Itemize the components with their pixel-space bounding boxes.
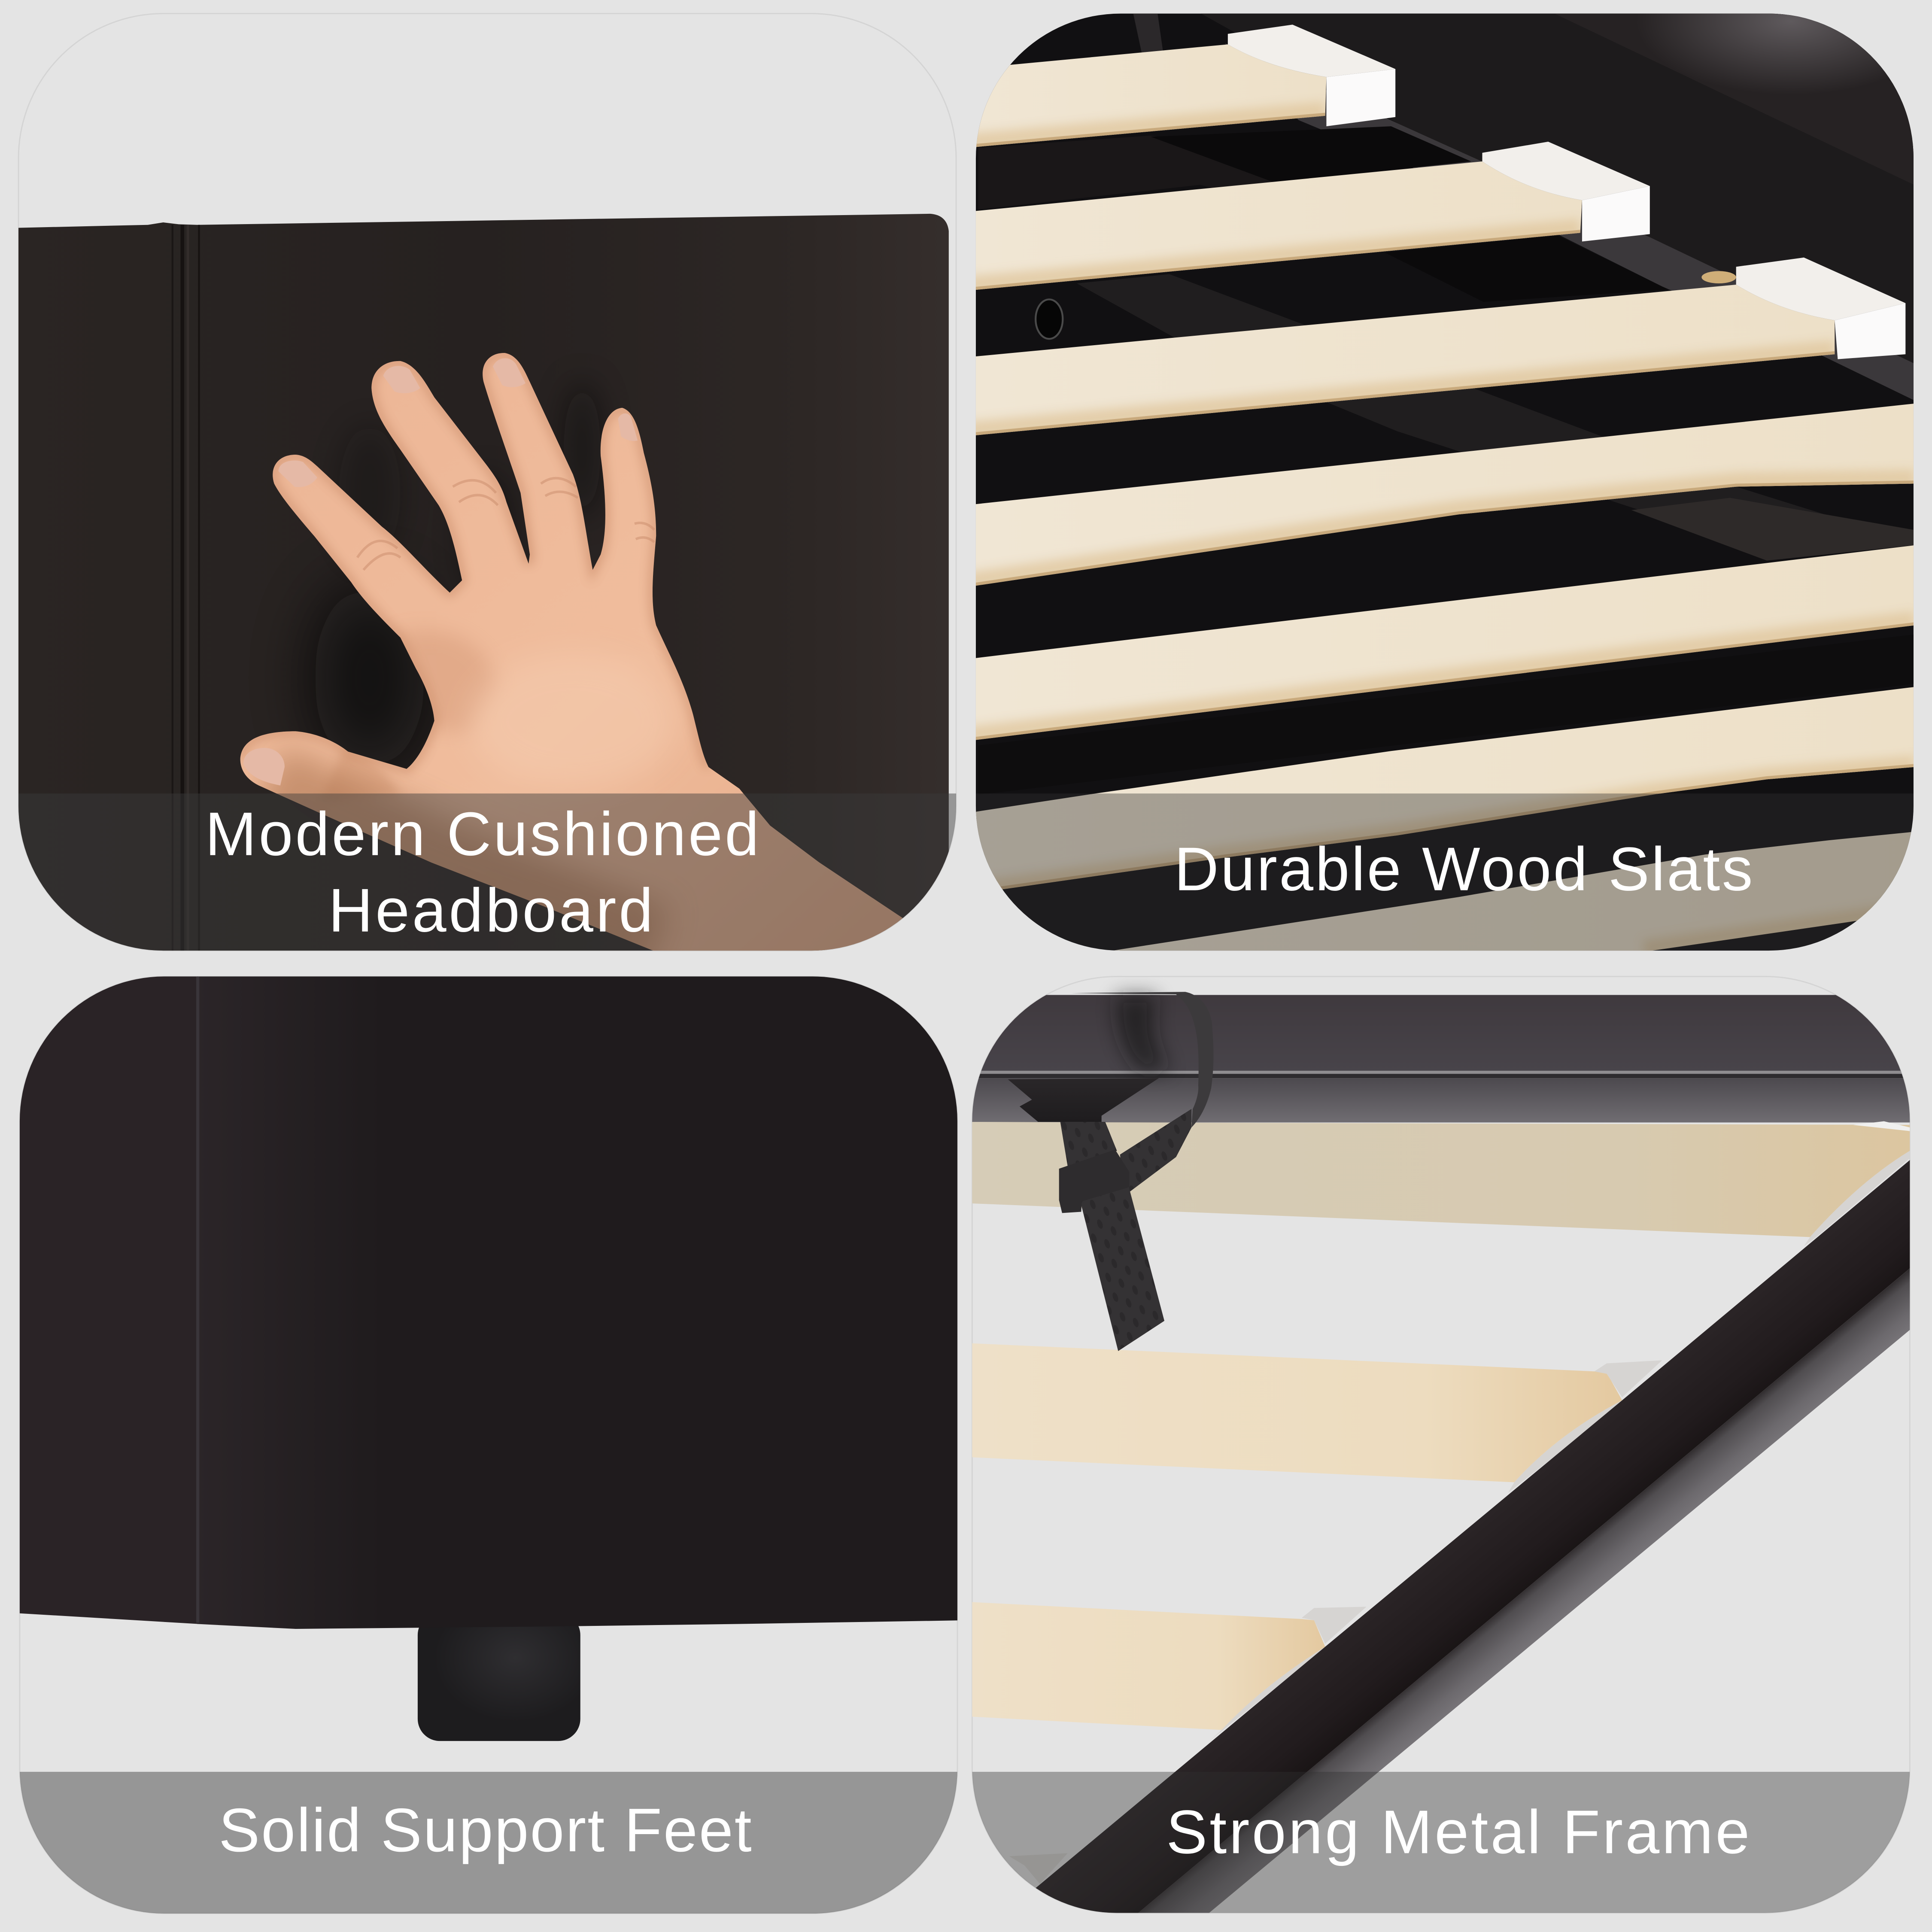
feet photo area <box>12 966 967 1920</box>
rail highlight <box>966 1071 1915 1074</box>
caption line 1: Modern Cushioned <box>205 800 759 869</box>
metal beam <box>1003 1156 1915 1918</box>
caption: Solid Support Feet: Solid Support Feet <box>219 1796 752 1865</box>
caption line 2: Headboard <box>328 876 653 945</box>
panel: solid support feet <box>12 966 967 1920</box>
slat 2 <box>966 161 1582 291</box>
strap <box>1008 992 1213 1351</box>
panel outline: feet <box>20 976 957 1914</box>
strap loop <box>1071 992 1213 1127</box>
upholstered headboard <box>12 214 949 961</box>
dark underside details <box>978 126 1914 795</box>
holder lower sliver <box>1209 1645 1330 1741</box>
fabric backdrop <box>1188 6 1927 407</box>
headboard photo area <box>12 214 961 961</box>
hand silhouette <box>240 353 912 961</box>
slat 6 <box>966 687 1915 895</box>
strap right band <box>1120 1109 1191 1192</box>
wood slat lower <box>966 1602 1325 1730</box>
slat 1 <box>966 44 1326 148</box>
slat 7 <box>1105 832 1915 952</box>
upper rail <box>966 995 1915 1072</box>
strap upper <box>1060 1122 1117 1166</box>
beam shadow <box>1132 1264 1915 1918</box>
bolt <box>1036 299 1063 339</box>
foot body <box>418 1613 580 1741</box>
slat 4 <box>966 404 1915 587</box>
fingernails <box>243 358 638 786</box>
panel outline: frame <box>972 976 1910 1913</box>
caption banner <box>966 1772 1915 1920</box>
corner seam <box>197 976 199 1623</box>
slat 3 <box>966 285 1835 436</box>
metal side rail <box>1225 43 1927 407</box>
holder top sliver <box>1804 1151 1910 1246</box>
black bracket <box>1008 1078 1159 1122</box>
plastic slat holders <box>1228 24 1905 359</box>
wood slat middle <box>966 1343 1622 1482</box>
holder 1 front <box>1326 69 1395 126</box>
panel outline: slats <box>976 14 1914 951</box>
holder 2 <box>1482 142 1650 200</box>
caption banner <box>966 793 1927 957</box>
holder 3 <box>1736 258 1905 320</box>
slat warm grain shading <box>966 111 1915 949</box>
strap knot <box>1059 1150 1129 1213</box>
frame photo area <box>966 992 1915 1920</box>
shadow around hand <box>314 382 601 770</box>
holder 3 front <box>1835 303 1905 359</box>
hand volume shading <box>240 353 708 951</box>
holder middle sliver <box>1508 1398 1628 1493</box>
holder 2 front <box>1582 186 1650 242</box>
screw <box>1701 271 1736 283</box>
rail underside line <box>966 1074 1915 1078</box>
panel: modern cushioned headboard <box>12 14 961 961</box>
panel: strong metal frame <box>966 976 1915 1920</box>
bed main panel <box>197 966 967 1629</box>
upper bracket <box>1132 9 1163 52</box>
holder top <box>1853 1121 1910 1131</box>
bed side section <box>12 966 198 1624</box>
rail shadow <box>1117 996 1170 1070</box>
wood slat top <box>966 1122 1910 1237</box>
seam stitching <box>173 225 199 951</box>
holder middle <box>1595 1360 1662 1397</box>
slat 5 <box>966 545 1915 741</box>
slat holders <box>1009 1121 1910 1884</box>
slats photo area <box>966 6 1927 957</box>
caption: Modern Cushioned Headboard <box>205 800 759 945</box>
panel: durable wood slats <box>966 6 1927 957</box>
strap tail <box>1079 1182 1164 1351</box>
leather headboard edge <box>1539 6 1927 191</box>
holder bottom <box>1009 1853 1068 1884</box>
knuckle creases <box>357 478 654 570</box>
panel outline: headboard <box>18 14 956 951</box>
caption: Strong Metal Frame: Strong Metal Frame <box>1166 1798 1750 1866</box>
rail lower face <box>966 1078 1915 1122</box>
hand <box>240 353 912 961</box>
caption banner <box>12 1772 967 1920</box>
caption: Durable Wood Slats: Durable Wood Slats <box>1174 835 1753 904</box>
holder lower <box>1302 1607 1367 1643</box>
support foot <box>418 1613 580 1741</box>
caption banner <box>12 793 961 957</box>
holder 1 <box>1228 24 1395 77</box>
